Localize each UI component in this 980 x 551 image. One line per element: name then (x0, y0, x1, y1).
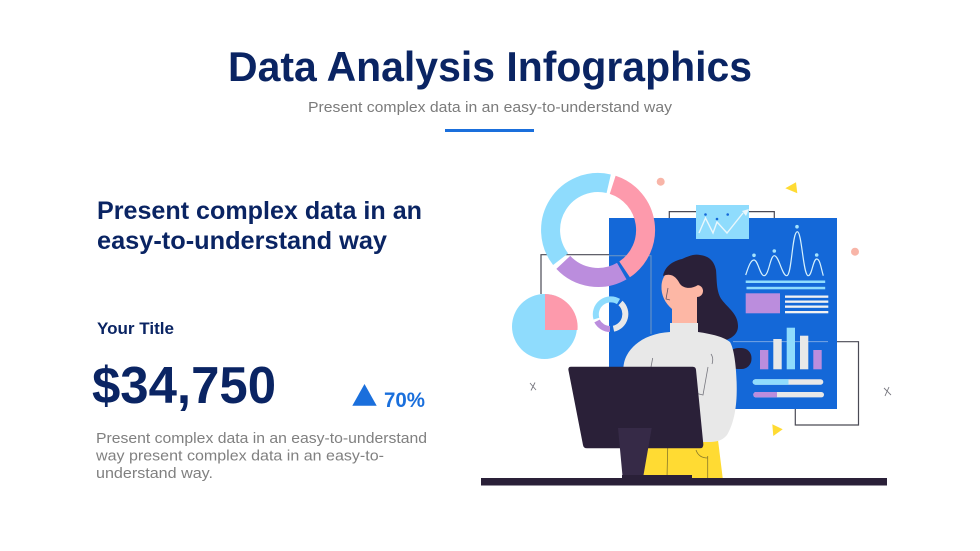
ear (691, 285, 703, 297)
hair fringe (663, 255, 704, 288)
large donut chart (551, 182, 646, 277)
left text column (92, 197, 427, 482)
body text (95, 430, 427, 482)
subtitle: Present complex data in an easy-to-understand way (308, 99, 673, 116)
illustration (481, 178, 891, 485)
body text: way present complex data in an easy-to- (95, 448, 384, 464)
connector lines (541, 212, 858, 425)
decorative shapes (530, 178, 891, 436)
percentage: 70% (384, 389, 425, 412)
progress bars (753, 379, 824, 397)
header (228, 43, 752, 132)
small donut chart (596, 299, 625, 329)
monitor stand (618, 428, 652, 478)
monitor foot (622, 475, 692, 478)
body text: Present complex data in an easy-to-understand (96, 430, 427, 447)
hair bun (728, 348, 752, 369)
face detail (666, 288, 670, 300)
desk (481, 478, 887, 486)
panel inner outline (609, 256, 651, 334)
title underline (445, 129, 534, 132)
bar chart (733, 328, 828, 369)
sweater folds (651, 354, 713, 395)
yellow trousers (643, 440, 723, 478)
line chart (746, 225, 823, 276)
blue dashboard panel (609, 218, 837, 409)
body text: understand way. (96, 465, 213, 482)
mini trend card (696, 205, 749, 239)
title: Data Analysis Infographics (228, 43, 752, 90)
neck and face (661, 270, 697, 325)
section heading: easy-to-understand way (97, 227, 387, 255)
person (623, 255, 752, 478)
section heading (97, 197, 422, 255)
panel text lines (746, 280, 828, 313)
pie chart (512, 294, 578, 359)
section heading: Present complex data in an (97, 197, 422, 225)
big number: $34,750 (92, 357, 276, 415)
hair back (680, 255, 738, 340)
sweater (623, 323, 737, 442)
your title label: Your Title (97, 319, 174, 338)
monitor (568, 367, 703, 448)
trouser seams (667, 448, 708, 478)
icon: up triangle (352, 384, 377, 406)
